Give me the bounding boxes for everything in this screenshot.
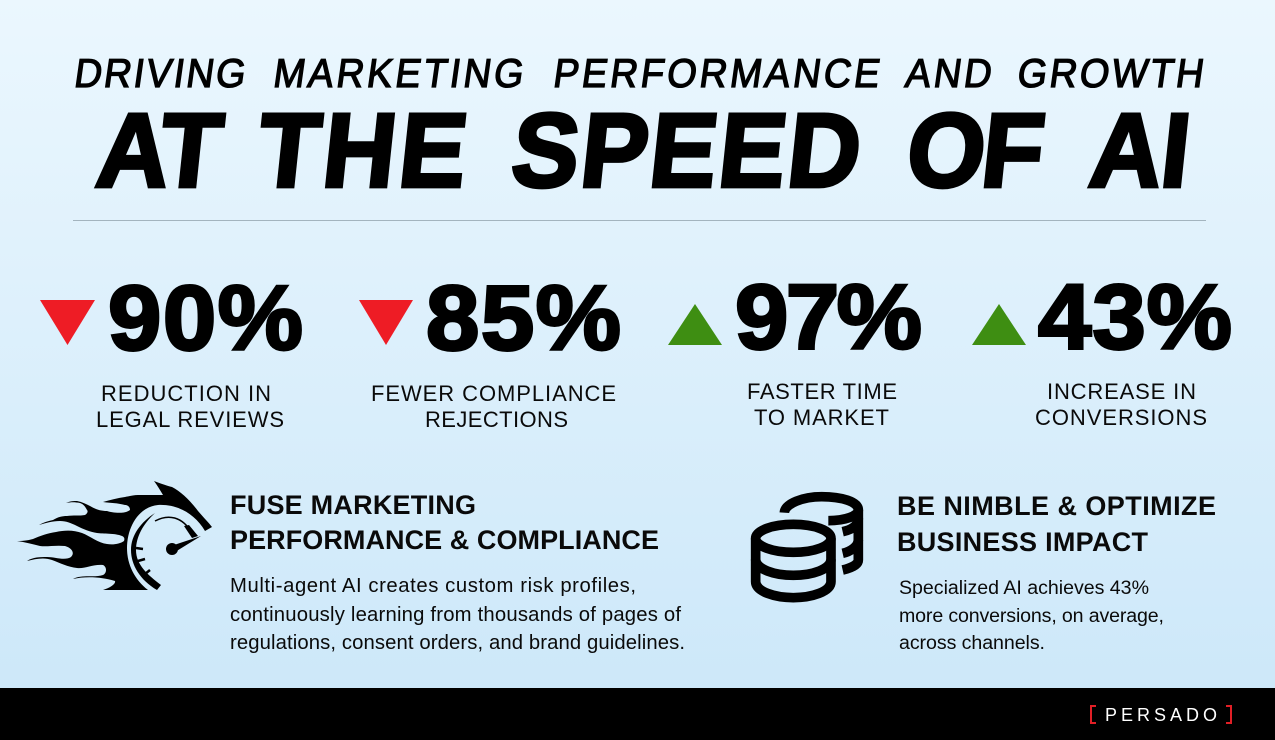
number: 85%: 85% bbox=[426, 266, 621, 369]
title line 1: DRIVING bbox=[72, 51, 249, 96]
icon: red down triangle bbox=[359, 300, 413, 345]
title line 2: AT bbox=[92, 91, 228, 209]
label: CONVERSIONS bbox=[1035, 405, 1207, 430]
stat: 85% fewer compliance rejections bbox=[359, 266, 621, 432]
heading: be nimble: BUSINESS IMPACT bbox=[897, 527, 1148, 557]
title line 2: OF bbox=[902, 91, 1050, 209]
label: TO MARKET bbox=[754, 405, 889, 430]
title line 1: PERFORMANCE bbox=[551, 51, 883, 96]
text: be nimble body: Specialized AI achieves 43% bbox=[899, 577, 1149, 599]
text: be nimble body: more conversions, on average, bbox=[899, 605, 1164, 627]
footer bar bbox=[0, 688, 1275, 740]
text: fuse marketing body: regulations, consent orders, and brand guidelines. bbox=[230, 632, 685, 654]
label: FEWER COMPLIANCE bbox=[371, 381, 616, 406]
title line 2: THE bbox=[253, 91, 473, 209]
icon: flaming speedometer bbox=[17, 481, 212, 590]
label: REDUCTION IN bbox=[101, 381, 271, 406]
logo right bracket bbox=[1226, 706, 1231, 723]
title line 2: SPEED bbox=[507, 91, 867, 209]
icon: red down triangle bbox=[40, 300, 95, 345]
title line 1: GROWTH bbox=[1015, 51, 1207, 96]
heading: be nimble: BE NIMBLE & OPTIMIZE bbox=[897, 491, 1216, 521]
title line 2: AI bbox=[1085, 91, 1196, 209]
label: LEGAL REVIEWS bbox=[96, 407, 284, 432]
text: be nimble body: across channels. bbox=[899, 632, 1045, 654]
heading: fuse marketing: PERFORMANCE & COMPLIANCE bbox=[230, 525, 659, 555]
title line 1: MARKETING bbox=[271, 51, 527, 96]
stat: 43% increase in conversions bbox=[972, 265, 1232, 430]
icon: green up triangle bbox=[972, 304, 1026, 345]
text: fuse marketing body: Multi-agent AI creates custom risk profiles, bbox=[230, 575, 636, 597]
label: INCREASE IN bbox=[1047, 379, 1196, 404]
heading: fuse marketing: FUSE MARKETING bbox=[230, 490, 476, 520]
logo: Persado bbox=[1091, 705, 1231, 725]
label: FASTER TIME bbox=[747, 379, 897, 404]
stat: 97% faster time to market bbox=[668, 265, 922, 430]
title line 1: AND bbox=[903, 51, 995, 96]
icon: green up triangle bbox=[668, 304, 722, 345]
title bbox=[72, 51, 1207, 209]
number: 43%: 43% bbox=[1038, 265, 1232, 368]
number: 90%: 90% bbox=[108, 266, 303, 369]
icon: coin stacks bbox=[756, 497, 858, 598]
number: 97%: 97% bbox=[735, 265, 922, 368]
logo wordmark: PERSADO bbox=[1105, 705, 1217, 725]
stat: 90% reduction in legal reviews bbox=[40, 266, 303, 432]
label: REJECTIONS bbox=[425, 407, 568, 432]
text: fuse marketing body: continuously learning from thousands of pages of bbox=[230, 604, 681, 626]
logo left bracket bbox=[1091, 706, 1096, 723]
